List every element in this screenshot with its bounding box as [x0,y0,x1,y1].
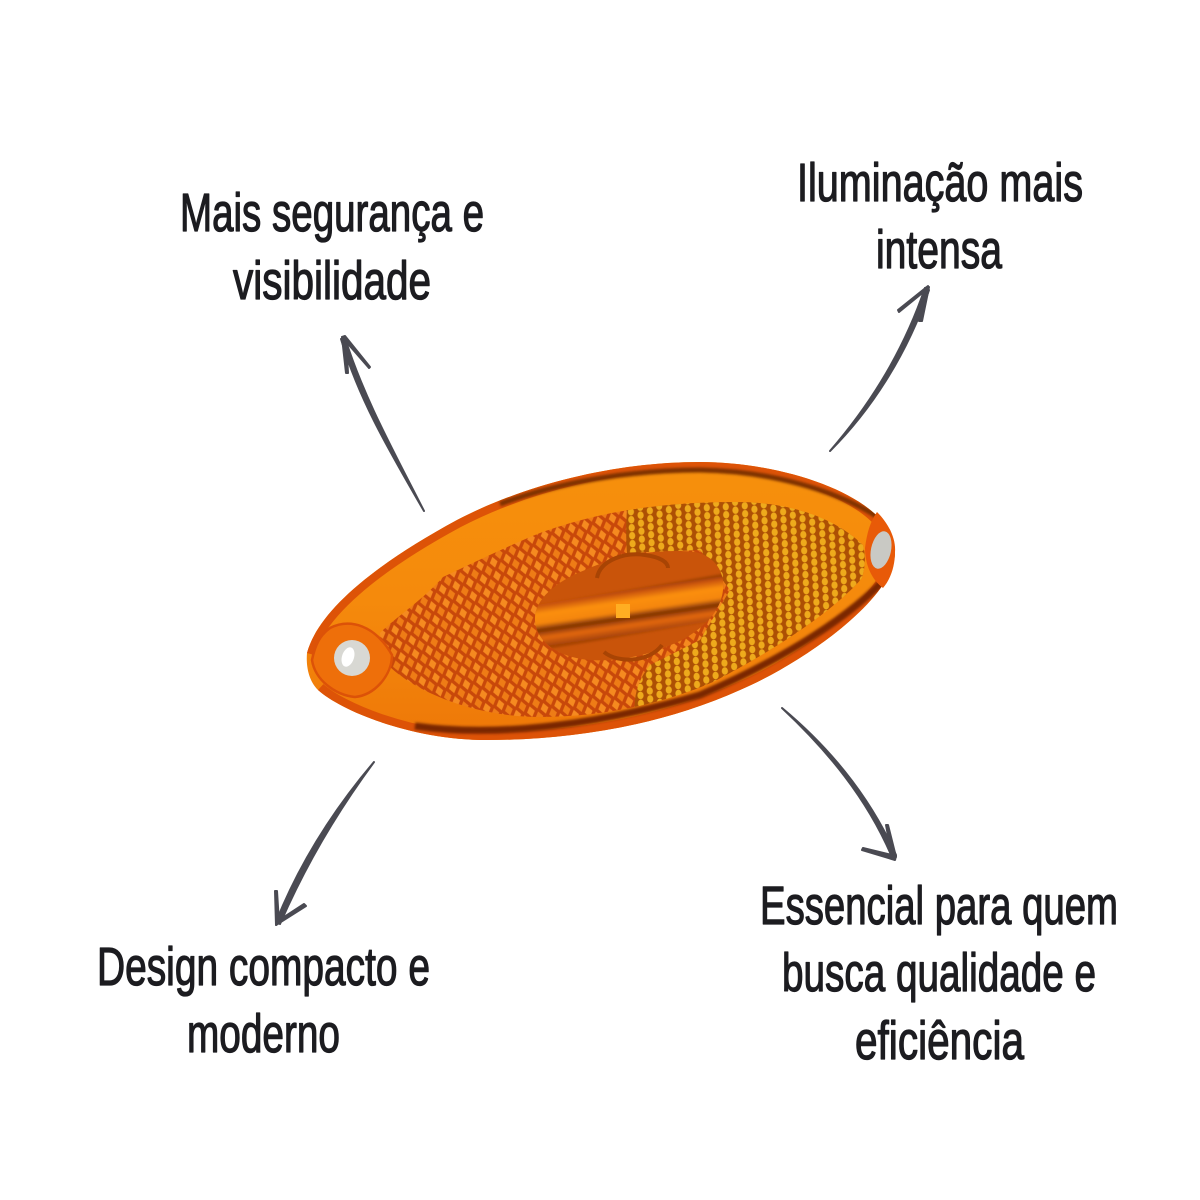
heading: Iluminação mais intensa: intensa [876,220,1003,280]
heading: Iluminação mais intensa [797,153,1083,280]
centre oval window [535,551,723,660]
heading: Mais segurança e visibilidade [180,183,484,311]
left mount hole [334,640,370,676]
lens rim shading [307,462,895,740]
arrow: down-right toward Essencial [782,708,896,860]
upper boss ring [597,554,668,578]
heading: Iluminação mais intensa: Iluminação mais [797,153,1083,213]
heading: Essencial para quem busca qualidade e eficiência [760,876,1118,1071]
product photo: amber side marker lamp [307,462,900,740]
infographic canvas [100,161,1116,1060]
arrow: up-right toward Iluminação [830,286,929,451]
reflector: dotted right side [626,502,865,707]
heading: Essencial para quem busca qualidade e eficiência: eficiência [855,1011,1025,1071]
centre ribs [530,573,730,652]
right mount hole [867,529,895,571]
heading: Mais segurança e visibilidade: visibilidade [233,251,431,311]
reflector: diamond texture [380,502,865,717]
left mount collar [312,624,392,697]
heading: Design compacto e moderno: Design compacto e [97,937,430,997]
lamp outer lens [307,462,895,740]
heading: Design compacto e moderno: moderno [187,1004,340,1064]
right mount collar [865,512,895,588]
arrow: up-left toward Mais segurança [341,336,424,511]
left mount hole centre [339,646,357,668]
centre bright spot [616,604,630,618]
lower boss ring [604,645,662,660]
arrow: down-left toward Design compacto [275,762,374,925]
heading: Mais segurança e visibilidade: Mais segurança e [180,183,484,243]
heading: Design compacto e moderno [97,937,430,1064]
